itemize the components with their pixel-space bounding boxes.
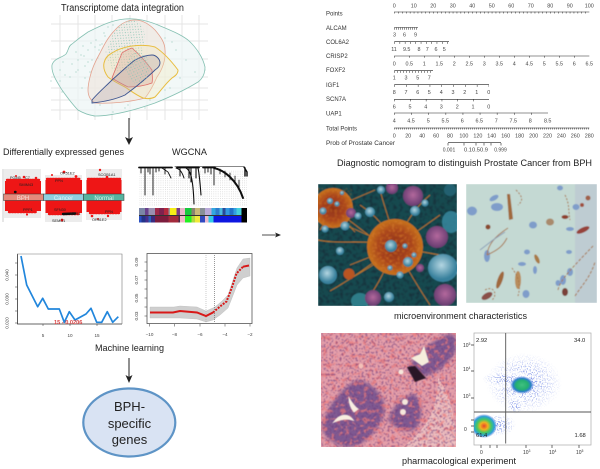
image: immunohistochemistry micrograph xyxy=(466,184,597,303)
nomogram row labels: SCN7A xyxy=(326,97,346,103)
gene labels: PPN xyxy=(105,210,113,214)
nomogram tick labels: 280 xyxy=(585,134,594,140)
nomogram tick labels: 260 xyxy=(571,134,580,140)
nomogram tick labels: 6 xyxy=(434,47,438,53)
axis labels: −2 xyxy=(247,332,253,337)
nomogram tick labels: 200 xyxy=(529,134,538,140)
axis labels: 15 xyxy=(94,333,100,338)
black gene points xyxy=(15,192,75,214)
nomogram tick labels: 4 xyxy=(440,90,443,96)
axis labels: 0.09 xyxy=(134,257,139,266)
nomogram tick labels: 2 xyxy=(456,104,459,110)
group strip labels: Cancer xyxy=(54,196,73,202)
nomogram tick labels: 1 xyxy=(393,76,396,82)
axis labels: 0.030 xyxy=(4,293,10,305)
chart: WGCNA dendrogram and module colors xyxy=(139,166,247,222)
axis tick labels: 0 xyxy=(464,427,467,433)
nomogram tick labels: 8.5 xyxy=(544,118,551,124)
nomogram tick labels: 7 xyxy=(428,76,431,82)
nomogram tick labels: 8 xyxy=(529,118,532,124)
hull: navy group xyxy=(92,55,160,103)
nomogram tick labels: 5.5 xyxy=(556,62,563,68)
quadrant percentages: 61.4 xyxy=(476,433,488,439)
nomogram tick labels: 6 xyxy=(403,32,406,38)
nomogram tick labels: 6 xyxy=(573,62,576,68)
nomogram tick labels: 5 xyxy=(416,76,419,82)
axis labels: −10 xyxy=(146,332,154,337)
axis labels: 0.020 xyxy=(4,317,10,329)
nomogram tick labels: 5 xyxy=(408,104,412,110)
nomogram tick labels: 140 xyxy=(487,134,496,140)
nomogram row labels: Points xyxy=(326,12,343,18)
nomogram tick labels: 50 xyxy=(489,4,495,10)
nomogram tick labels: 2 xyxy=(463,90,466,96)
nomogram tick labels: 1.5 xyxy=(436,62,443,68)
axis tick labels: 3 xyxy=(469,393,471,397)
callout: BPH-specific genes: specific xyxy=(108,416,152,431)
axis labels: −4 xyxy=(222,332,228,337)
callout: BPH-specific genes: genes xyxy=(112,432,148,447)
nomogram tick labels: 11 xyxy=(391,47,397,53)
nomogram tick labels: 20 xyxy=(405,134,411,140)
nomogram tick labels: 7 xyxy=(495,118,498,124)
caption: microenvironment characteristics: microenvironment characteristics xyxy=(394,311,528,321)
nomogram row labels: Total Points xyxy=(326,126,357,132)
error line xyxy=(21,256,118,322)
nomogram tick labels: 1 xyxy=(475,90,478,96)
error band xyxy=(150,258,250,322)
axis tick labels: 10 xyxy=(549,450,555,456)
heading: WGCNA: WGCNA xyxy=(172,147,208,158)
hull: red group xyxy=(88,20,165,103)
axis labels xyxy=(4,269,100,338)
gene labels: PGM5 xyxy=(10,176,21,180)
dotted lambda line two xyxy=(214,255,216,323)
nomogram tick labels: 3 xyxy=(393,32,396,38)
nomogram tick labels: 2.5 xyxy=(466,62,473,68)
quadrant percentages: 34.0 xyxy=(574,338,585,344)
nomogram tick labels: 6.5 xyxy=(586,62,593,68)
axis labels: 0.07 xyxy=(134,275,139,284)
nomogram tick labels: 7.5 xyxy=(510,118,517,124)
quadrant gates xyxy=(474,333,591,444)
nomogram tick labels: 180 xyxy=(515,134,524,140)
nomogram tick labels: 30 xyxy=(450,4,456,10)
axis tick labels: 5 xyxy=(582,449,584,453)
nomogram tick labels: 6 xyxy=(461,118,464,124)
scattered events xyxy=(474,354,560,438)
nomogram tick labels: 5 xyxy=(427,118,430,124)
callout: BPH-specific genes: BPH- xyxy=(114,399,145,414)
scatter: teal points xyxy=(51,25,205,116)
nomogram tick labels: 160 xyxy=(501,134,510,140)
gene labels: SFN30 xyxy=(54,208,66,212)
nomogram tick labels: 5 xyxy=(543,62,546,68)
nomogram row labels: ALCAM xyxy=(326,26,347,32)
mean deviance curve xyxy=(150,266,249,316)
nomogram tick labels: 6.5 xyxy=(476,118,483,124)
dendrogram xyxy=(139,166,247,204)
gene labels: AGR1 xyxy=(70,212,80,216)
gene labels: PPN xyxy=(55,179,63,183)
axis tick labels: 4 xyxy=(469,366,471,370)
nomogram tick labels: 240 xyxy=(557,134,566,140)
nomogram tick labels: 4 xyxy=(424,104,427,110)
arrow: machine learning to genes xyxy=(126,358,132,383)
nomogram tick labels: 5 xyxy=(428,90,431,96)
nomogram tick labels: 40 xyxy=(469,4,475,10)
nomogram tick labels: 10 xyxy=(411,4,417,10)
nomogram tick labels: 100 xyxy=(585,4,594,10)
nomogram tick labels: 3 xyxy=(452,90,454,96)
gene labels: SCGB1A1 xyxy=(98,173,116,177)
axis labels: 0.040 xyxy=(4,269,10,281)
red point masses xyxy=(5,179,122,214)
nomogram tick labels: 3.5 xyxy=(496,62,503,68)
dotted lambda lines xyxy=(205,255,207,323)
heading: transcriptome data integration: Transcriptome data integration xyxy=(61,3,184,14)
image: tumor microenvironment illustration xyxy=(313,182,460,309)
nomogram tick labels: 3 xyxy=(404,76,408,82)
gene labels: PPP1 xyxy=(23,208,33,212)
nomogram tick labels: 0 xyxy=(393,62,396,68)
nomogram tick labels: 100 xyxy=(459,134,468,140)
chart: cross-validation error line xyxy=(4,254,122,338)
nomogram tick labels: 5.5 xyxy=(442,118,449,124)
callout: BPH-specific genes xyxy=(83,388,175,456)
gene labels: SMIM43 xyxy=(19,183,33,187)
axis labels: −6 xyxy=(197,332,203,337)
group strip labels: Normal xyxy=(94,196,114,202)
axis tick labels: 10 xyxy=(523,450,529,456)
nomogram row labels: UAP1 xyxy=(326,112,342,118)
nomogram row labels: FOXF2 xyxy=(326,68,346,74)
group strip labels xyxy=(4,194,124,202)
nomogram tick labels: 80 xyxy=(447,134,453,140)
nomogram row labels: IGF1 xyxy=(326,83,340,89)
chart: lasso coefficient cross-validation curve xyxy=(134,254,253,337)
scatter: dense center cluster xyxy=(126,52,150,84)
group strip labels: BPH xyxy=(17,196,29,202)
axis tick labels: 4 xyxy=(555,449,557,453)
nomogram tick labels: 9.5 xyxy=(403,47,410,53)
nomogram tick labels: 40 xyxy=(419,134,425,140)
axis labels: 5 xyxy=(42,333,45,338)
hull: red inner group xyxy=(112,48,152,87)
nomogram tick labels: 0.999 xyxy=(494,148,507,154)
caption: pharmacological experiment: pharmacological experiment xyxy=(402,456,517,466)
chart: flow cytometry quadrant plot xyxy=(463,333,591,456)
nomogram row labels: Prob of Prostate Cancer xyxy=(326,141,395,147)
axis labels: 0.03 xyxy=(134,311,139,320)
nomogram axes xyxy=(394,12,589,146)
gene labels xyxy=(10,172,116,223)
nomogram tick labels: 20 xyxy=(430,4,436,10)
chart: overlapping hull scatter plot xyxy=(51,15,208,120)
axis tick labels: 0 xyxy=(480,450,483,456)
nomogram tick labels: 0.5 xyxy=(406,62,413,68)
nomogram tick labels: 80 xyxy=(547,4,553,10)
nomogram tick labels: 3 xyxy=(483,62,486,68)
gene labels: OR51E2 xyxy=(92,218,107,222)
nomogram tick labels: 90 xyxy=(567,4,573,10)
nomogram tick labels: 4 xyxy=(513,62,516,68)
hull: yellow group xyxy=(104,45,178,99)
nomogram tick labels: 60 xyxy=(508,4,514,10)
gene labels: SEMG1 xyxy=(52,219,65,223)
nomogram tick labels: 2 xyxy=(453,62,456,68)
axis labels: 10 xyxy=(67,333,73,338)
nomogram tick labels: 4.5 xyxy=(526,62,533,68)
nomogram tick labels: 0 xyxy=(487,104,490,110)
nomogram tick labels: 6 xyxy=(416,90,419,96)
quadrant percentages xyxy=(476,338,586,439)
nomogram tick labels: 6 xyxy=(393,104,396,110)
nomogram tick labels: 220 xyxy=(543,134,552,140)
gene labels: C7 xyxy=(25,176,30,180)
nomogram tick labels: 0 xyxy=(393,4,396,10)
nomogram tick labels: 0 xyxy=(487,90,490,96)
quadrant percentages: 2.92 xyxy=(476,338,487,344)
nomogram tick labels: 3 xyxy=(440,104,443,110)
axis tick labels: 10 xyxy=(463,394,469,400)
module color rows xyxy=(139,208,247,222)
nomogram tick labels: 8 xyxy=(393,90,396,96)
arrow: transcriptome to DEGs xyxy=(125,118,133,145)
nomogram tick labels: 60 xyxy=(433,134,439,140)
label: machine learning: Machine learning xyxy=(95,343,164,353)
axis tick labels: 3 xyxy=(529,449,531,453)
heading: differentially expressed genes: Differentially expressed genes xyxy=(3,147,124,157)
nomogram tick labels: 0.10.50.9 xyxy=(464,148,488,154)
outlier points xyxy=(7,169,109,221)
axis tick labels: 5 xyxy=(469,342,471,346)
axis tick labels xyxy=(463,342,584,456)
nomogram tick labels: 4.5 xyxy=(407,118,415,124)
nomogram tick labels: 70 xyxy=(528,4,534,10)
caption: diagnostic nomogram: Diagnostic nomogram to distinguish Prostate Cancer from BPH xyxy=(337,158,592,168)
scatter: dense upper cluster xyxy=(100,15,152,77)
axis ticks xyxy=(471,345,579,448)
arrow: left workflow to right results xyxy=(262,232,281,238)
panel: transcriptome data integration xyxy=(51,3,208,120)
quadrant percentages: 1.68 xyxy=(574,433,586,439)
nomogram tick labels: 8 xyxy=(418,47,420,53)
axis tick labels: 10 xyxy=(576,450,582,456)
image: H&E histology micrograph xyxy=(321,333,456,447)
nomogram tick labels: 0 xyxy=(393,134,396,140)
nomogram tick labels: 5 xyxy=(443,47,446,53)
nomogram row labels xyxy=(326,12,395,147)
hull: teal outer group xyxy=(52,19,205,116)
panel: diagnostic nomogram xyxy=(326,4,594,154)
gene labels: OR51E2 xyxy=(60,172,75,176)
nomogram tick labels: 9 xyxy=(414,32,417,38)
axis labels xyxy=(134,257,253,337)
nomogram tick labels: 1 xyxy=(472,104,474,110)
nomogram row labels: COL6A2 xyxy=(326,40,350,46)
nomogram row labels: CRISP2 xyxy=(326,54,348,60)
nomogram tick labels: 7 xyxy=(404,90,408,96)
nomogram tick labels: 1 xyxy=(423,62,426,68)
nomogram tick labels: 120 xyxy=(473,134,482,140)
axis tick labels: 10 xyxy=(463,367,469,373)
axis labels: −8 xyxy=(172,332,178,337)
minimum annotation: 15 - 0.0206 xyxy=(54,320,82,326)
chart: differential expression strip plot xyxy=(2,169,124,223)
axis labels: 0.05 xyxy=(134,293,139,302)
nomogram tick labels: 0.001 xyxy=(443,148,455,154)
nomogram tick labels: 4 xyxy=(393,118,396,124)
nomogram tick labels xyxy=(391,4,594,154)
nomogram tick labels: 7 xyxy=(426,47,429,53)
axis tick labels: 10 xyxy=(463,343,469,349)
